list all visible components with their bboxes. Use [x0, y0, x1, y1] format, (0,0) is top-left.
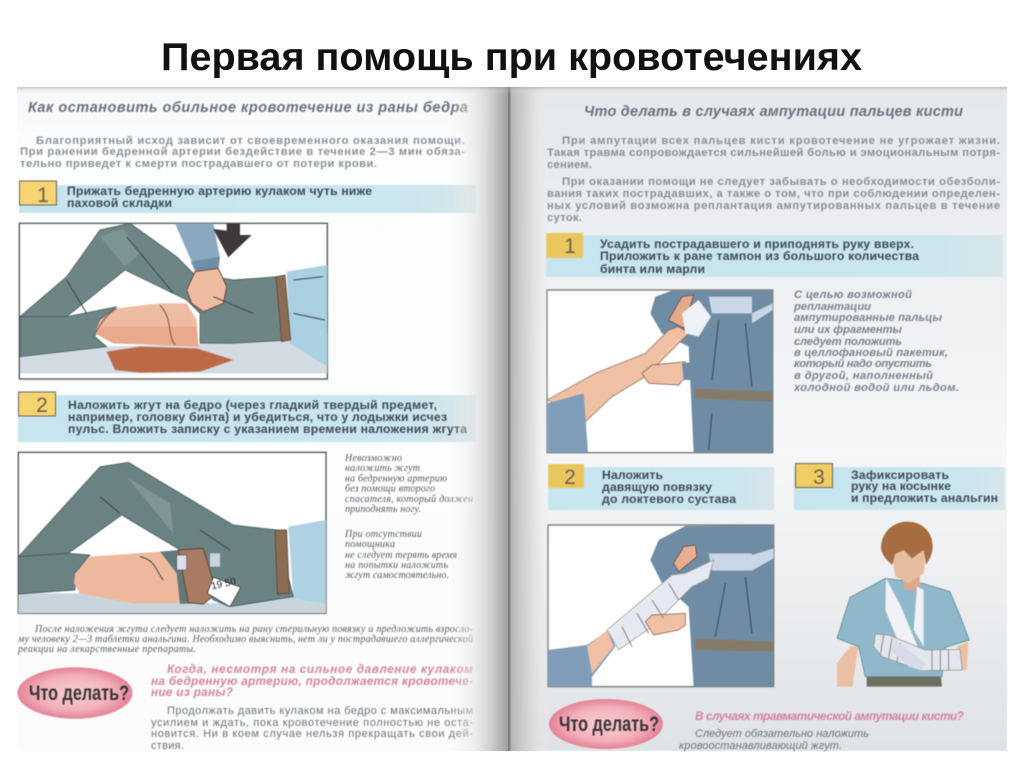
side note: second rescuer: без помощи второго: [345, 484, 435, 494]
side note: second rescuer: приподнять ногу.: [345, 504, 421, 515]
question: pink text: В случаях травматической ампутации кисти?: [695, 709, 964, 723]
step 1 band: 1: [37, 184, 49, 207]
intro text: сением.: [547, 159, 592, 171]
step 1 band: 1: [564, 235, 576, 258]
heading: thigh bleeding: Как остановить обильное кровотечение из раны бедра: [28, 100, 468, 116]
question: pink text: ние из раны?: [151, 685, 233, 699]
side note: second rescuer: не следует терять время: [345, 550, 457, 561]
heading: finger amputation: Что делать в случаях ампутации пальцев кисти: [584, 104, 963, 120]
answer text: [151, 705, 473, 752]
side note: replantation: ампутированные пальцы: [794, 312, 942, 324]
step 2 band: до локтевого сустава: [602, 492, 736, 506]
illustration: tourniquet on thigh: 19 50: [210, 576, 237, 592]
side note: replantation: или их фрагменты: [794, 324, 902, 336]
side note: second rescuer: на бедренную артерию: [345, 474, 447, 484]
answer text: новится. Ни в коем случае нельзя прекращать свои дей-: [151, 728, 473, 740]
step 3 band: 3: [813, 466, 825, 489]
side note: second rescuer: помощника: [345, 539, 395, 550]
illustration: pressure bandage to elbow: [548, 525, 774, 687]
step 1 band: бинта или марли: [600, 262, 705, 276]
italic note after tourniquet: му человеку 2—3 таблетки анальгина. Необходимо выяснить, нет ли у пострадавшего аллергической: [17, 634, 473, 645]
illustration: raised arm with gauze: [547, 290, 773, 453]
panel: right book page, finger amputation: [510, 87, 1007, 752]
intro text: [20, 135, 465, 170]
side note: replantation: следует положить: [794, 336, 902, 348]
intro text: ных условий возможна реплантация ампутированных пальцев в течение: [547, 200, 1000, 212]
answer text: кровоостанавливающий жгут.: [679, 740, 842, 752]
side note: second rescuer: жгут самостоятельно.: [345, 570, 449, 581]
side note: second rescuer: на попытки наложить: [345, 560, 448, 571]
step 1 band: Усадить пострадавшего и приподнять руку вверх.: [600, 237, 914, 251]
answer text: [679, 728, 869, 752]
step 2 band: пульс. Вложить записку с указанием времени наложения жгута: [68, 422, 467, 436]
intro text: При ранении бедренной артерии бездействие в течение 2—3 мин обяза-: [20, 146, 465, 158]
badge: what to do (left): Что делать?: [29, 682, 129, 705]
side note: replantation: в другой, наполненный: [794, 370, 933, 382]
step 2 band: Наложить жгут на бедро (через гладкий твердый предмет,: [68, 398, 437, 412]
intro text: [547, 135, 1000, 224]
badge: what to do (right): [549, 699, 663, 749]
step 2 band: давящую повязку: [602, 480, 712, 494]
illustration: tourniquet on thigh: [18, 452, 326, 613]
side note: second rescuer: наложить жгут: [345, 463, 420, 474]
question: pink text: [151, 662, 473, 699]
answer text: Продолжать давить кулаком на бедро с максимальным: [167, 705, 473, 717]
step 2 band: например, головку бинта) и убедиться, что у лодыжки исчез: [68, 410, 447, 424]
step 1 band: [546, 233, 1003, 277]
question: pink text: на бедренную артерию, продолжается кровотече-: [151, 674, 473, 688]
step 3 band: руку на косынке: [851, 479, 951, 493]
italic note after tourniquet: [17, 624, 473, 655]
side note: second rescuer: При отсутствии: [344, 529, 422, 540]
side note: replantation: реплантации: [793, 301, 871, 313]
badge: what to do (right): Что делать?: [559, 713, 659, 736]
step 1 band: Приложить к ране тампон из большого количества: [600, 249, 919, 263]
side note: second rescuer: спасателя, который должен: [345, 494, 473, 505]
italic note after tourniquet: реакции на лекарственные препараты.: [17, 644, 196, 655]
intro text: Такая травма сопровождается сильнейшей болью и эмоциональным потря-: [547, 147, 1000, 159]
side note: replantation: который надо опустить: [794, 358, 932, 370]
title: Первая помощь при кровотечениях: [161, 36, 863, 79]
italic note after tourniquet: После наложения жгута следует наложить на рану стерильную повязку и предложить взросло-: [34, 624, 473, 635]
side note: replantation: холодной водой или льдом.: [793, 382, 959, 394]
step 2 band: 2: [564, 466, 576, 489]
step 3 band: и предложить анальгин: [851, 491, 998, 505]
panel: left book page, thigh wound: [17, 87, 512, 752]
side note: second rescuer: [344, 453, 473, 581]
step 2 band: [18, 392, 476, 442]
intro text: тельно приведет к смерти пострадавшего от потери крови.: [20, 158, 377, 170]
badge: what to do (left): [18, 667, 132, 719]
answer text: Следует обязательно наложить: [695, 728, 869, 740]
step 1 band: [19, 181, 476, 213]
illustration: fist pressing femoral artery: [19, 223, 327, 379]
intro text: При оказании помощи не следует забывать о необходимости обезболи-: [562, 176, 1000, 188]
side note: second rescuer: Невозможно: [344, 453, 402, 464]
step 2 band: [548, 464, 774, 510]
intro text: суток.: [547, 212, 582, 224]
intro text: вания таких пострадавших, а также о том, что при соблюдении определен-: [547, 188, 1000, 200]
intro text: Благоприятный исход зависит от своевременного оказания помощи.: [36, 135, 465, 147]
step 2 band: Наложить: [602, 468, 663, 482]
step 3 band: Зафиксировать: [851, 468, 949, 482]
side note: replantation: [793, 289, 959, 394]
answer text: ствия.: [151, 740, 184, 752]
step 2 band: 2: [36, 394, 48, 417]
step 3 band: [794, 464, 1005, 510]
answer text: усилием и ждать, пока кровотечение полностью не оста-: [151, 717, 473, 729]
step 1 band: Прижать бедренную артерию кулаком чуть ниже: [67, 184, 372, 198]
intro text: При ампутации всех пальцев кисти кровотечение не угрожает жизни.: [562, 135, 1000, 147]
side note: replantation: в целлофановый пакетик,: [794, 347, 948, 359]
illustration: man with arm in sling: [837, 522, 969, 687]
step 1 band: паховой складки: [67, 196, 172, 210]
question: pink text: Когда, несмотря на сильное давление кулаком: [167, 662, 473, 676]
side note: replantation: С целью возможной: [794, 289, 912, 301]
